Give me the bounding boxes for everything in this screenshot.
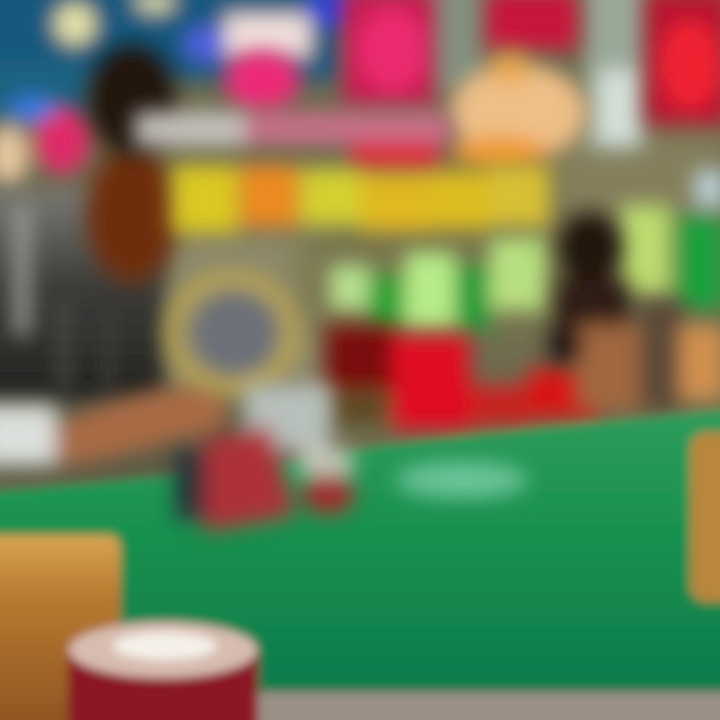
grey floor strip xyxy=(250,692,720,720)
row of yellow cards xyxy=(172,165,550,233)
peach lamp shape xyxy=(450,52,586,168)
amber glass foreground left xyxy=(0,535,120,720)
man: head and hair xyxy=(86,44,178,283)
man: arm and cuff xyxy=(0,385,228,465)
person on the right xyxy=(547,212,720,410)
top red and pink lights xyxy=(0,0,720,185)
red chip stack foreground xyxy=(68,622,258,720)
amber glass right edge xyxy=(690,432,720,602)
row of red chips xyxy=(325,325,598,430)
top background: blue wall and lights xyxy=(0,0,645,150)
man: shirt xyxy=(0,190,165,402)
banner strip xyxy=(135,112,450,170)
row of green cards xyxy=(330,170,720,330)
chip stacks on table xyxy=(175,385,354,532)
magnifying glass xyxy=(172,279,292,387)
table surface xyxy=(0,408,720,692)
